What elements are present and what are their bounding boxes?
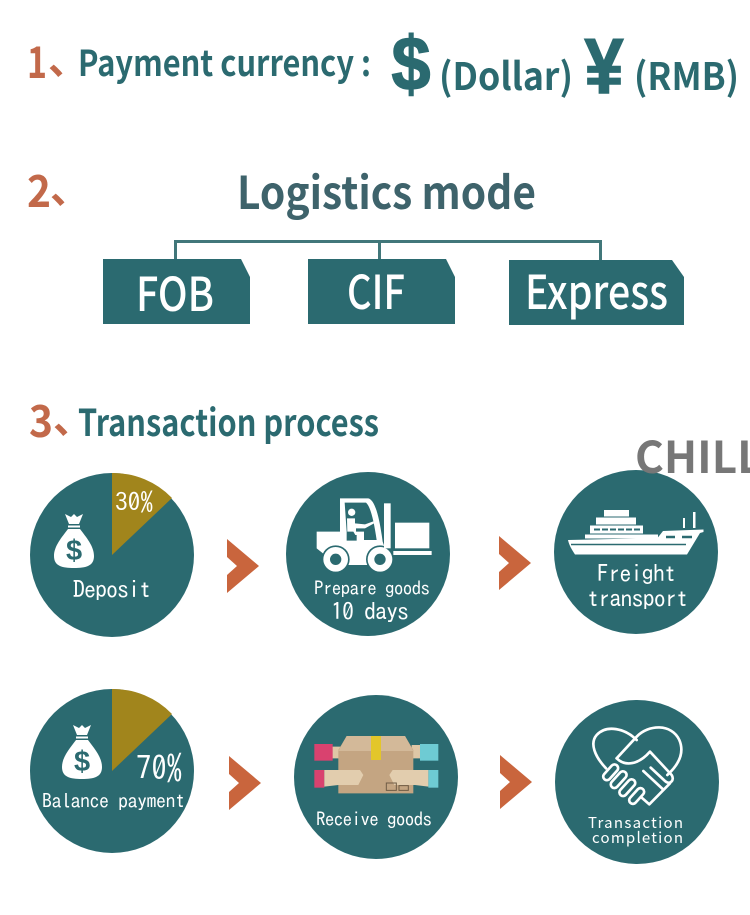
connector lines — [176, 242, 600, 260]
box: FOB — [103, 256, 250, 325]
enumeration mark: 、 — [50, 157, 90, 215]
arrow 1 — [227, 539, 259, 593]
heading: transaction process: Transaction process — [78, 393, 379, 447]
label: receive goods: Receive goods — [316, 810, 432, 829]
icon: handshake heart — [593, 727, 681, 805]
step: freight transport — [554, 470, 718, 634]
enumeration mark: 、 — [48, 28, 88, 86]
step: balance payment — [30, 689, 194, 853]
box: CIF — [308, 254, 455, 324]
icon: dollar sign: $ — [392, 22, 430, 107]
number 1: 1 — [27, 27, 47, 91]
label: transport: transport — [587, 586, 688, 610]
box: CIF: CIF — [347, 254, 405, 323]
step: receive goods — [294, 695, 458, 859]
pie wedge 30% — [112, 473, 172, 555]
label 30%: 30% — [115, 489, 153, 515]
section 3 heading — [29, 386, 379, 450]
box: Express: Express — [525, 254, 668, 323]
icon: ship — [568, 510, 704, 554]
step: prepare goods — [286, 472, 450, 636]
box: FOB: FOB — [136, 256, 214, 325]
pie wedge — [112, 689, 172, 771]
icon: forklift — [317, 498, 432, 573]
icon: money bag — [54, 514, 94, 568]
arrow 4 — [500, 755, 532, 809]
label: dollar: (Dollar) — [439, 46, 573, 101]
section 2: logistics mode — [27, 156, 684, 325]
label: prepare goods: Prepare goods — [314, 579, 430, 598]
label: 70%: 70% — [136, 751, 182, 784]
step: transaction completion — [555, 700, 719, 864]
label: transaction: Transaction — [588, 812, 683, 833]
heading: logistics mode: Logistics mode — [237, 157, 536, 222]
arrow 2 — [499, 536, 531, 590]
section 1: payment currency — [27, 22, 739, 110]
label: 10 days: 10 days — [331, 599, 409, 623]
label: freight: Freight — [597, 561, 676, 585]
enumeration mark: 、 — [53, 387, 93, 445]
heading: payment currency: Payment currency : — [78, 35, 371, 87]
arrow 3 — [229, 756, 261, 810]
label: balance payment: Balance payment — [42, 791, 185, 811]
number 3: 3 — [29, 386, 53, 450]
label: completion: completion — [592, 827, 683, 848]
icon: money bag: $ — [74, 746, 90, 778]
icon: yuan sign: ¥ — [584, 22, 624, 110]
label: RMB: (RMB) — [634, 46, 739, 101]
label: deposit: Deposit — [73, 577, 151, 601]
step: deposit — [30, 473, 194, 637]
number 2: 2 — [27, 156, 51, 220]
icon: money bag: $ — [66, 535, 82, 567]
icon: money bag — [62, 725, 102, 779]
icon: box held by hands — [314, 736, 438, 793]
